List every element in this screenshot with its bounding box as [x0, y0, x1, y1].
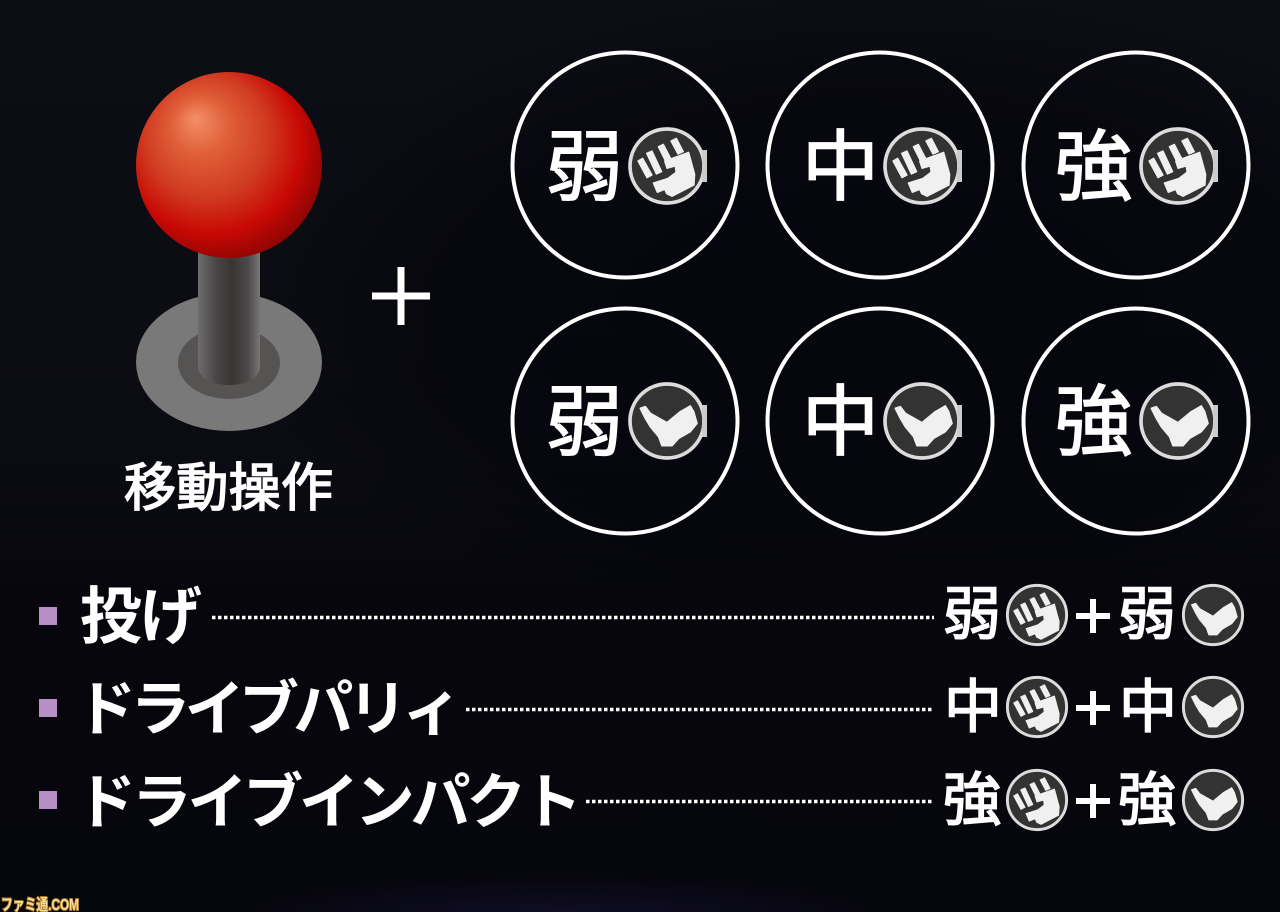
row: drive parry: [39, 675, 1243, 743]
button: medium kick: [768, 308, 992, 534]
row: drive impact: 強: [943, 768, 1001, 833]
button: light kick: 弱: [546, 380, 623, 466]
joystick base plate: [136, 293, 322, 431]
row: drive parry: 中: [944, 675, 1002, 740]
row: drive parry: ドライブパリィ: [76, 676, 462, 743]
row: throw: 弱: [1118, 582, 1176, 647]
joystick base well: [178, 327, 280, 399]
button: light punch: 弱: [546, 125, 623, 211]
button: medium punch: [768, 52, 992, 278]
joystick red ball: [136, 72, 322, 258]
joystick shaft: [198, 245, 260, 385]
row: drive impact: [39, 768, 1243, 836]
button: heavy kick: 強: [1055, 380, 1132, 466]
button: heavy punch: 強: [1055, 125, 1132, 211]
button: light kick: [512, 308, 738, 534]
plus sign: [372, 267, 430, 325]
row: drive impact: 強: [1118, 768, 1176, 833]
button: light punch: [512, 52, 738, 278]
row: throw: [39, 582, 1243, 652]
row: drive impact: ドライブインパクト: [76, 769, 582, 836]
icon: arcade joystick: [136, 72, 322, 431]
row: throw: 弱: [943, 582, 1001, 647]
button: medium kick: 中: [802, 380, 879, 466]
row: throw: 投げ: [80, 583, 202, 652]
button: heavy kick: [1024, 308, 1248, 534]
button: medium punch: 中: [802, 125, 879, 211]
label: movement: 移動操作: [124, 460, 333, 518]
row: drive parry: 中: [1119, 675, 1177, 740]
button: heavy punch: [1024, 52, 1248, 278]
